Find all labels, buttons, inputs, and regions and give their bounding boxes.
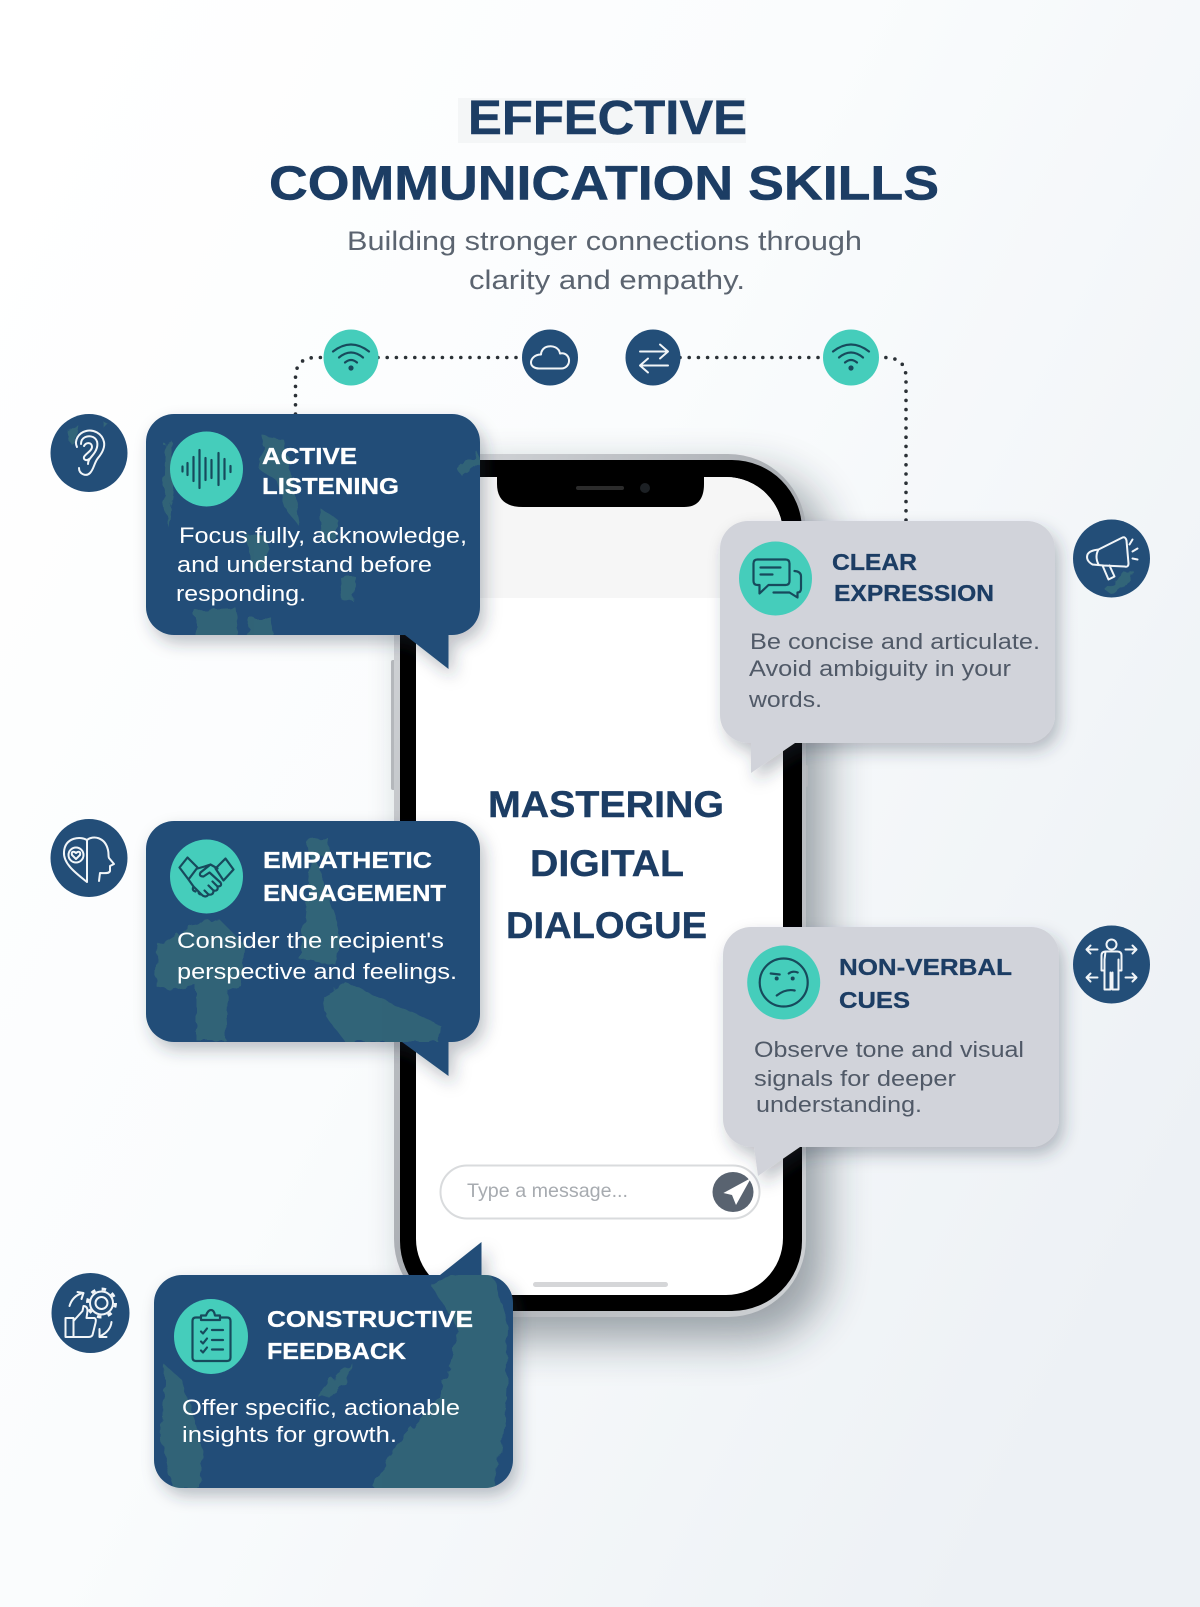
icon: thumbs up and gear badge xyxy=(52,1273,130,1353)
heading: EMPATHETIC xyxy=(263,847,432,873)
icon: handshake xyxy=(170,840,243,914)
icon: face xyxy=(747,946,820,1020)
panel: active listening xyxy=(146,414,480,669)
subtitle: Building stronger connections through xyxy=(347,226,862,256)
heading: FEEDBACK xyxy=(267,1338,406,1364)
description xyxy=(182,1395,460,1447)
heading: ACTIVE xyxy=(262,443,357,469)
heading xyxy=(263,847,446,906)
description: Focus fully, acknowledge, xyxy=(179,523,467,548)
description: perspective and feelings. xyxy=(177,959,457,984)
heading xyxy=(267,1306,473,1364)
panel: clear expression xyxy=(720,521,1055,773)
icon: wifi left xyxy=(324,330,378,386)
heading xyxy=(839,954,1012,1013)
icon: cloud xyxy=(522,330,578,386)
title: EFFECTIVE xyxy=(468,92,747,145)
heading: EXPRESSION xyxy=(834,580,994,606)
panel: empathetic engagement xyxy=(146,821,480,1076)
description: Consider the recipient's xyxy=(177,928,444,953)
description: Offer specific, actionable xyxy=(182,1395,460,1420)
description: Be concise and articulate. xyxy=(750,629,1040,654)
heading: CLEAR xyxy=(832,549,917,575)
description xyxy=(748,629,1040,712)
notch xyxy=(490,470,704,507)
message input field: Type a message... xyxy=(467,1180,628,1202)
phone mockup xyxy=(391,454,826,1340)
icon: chat bubbles xyxy=(739,542,812,616)
description: and understand before xyxy=(177,552,432,577)
phone screen xyxy=(416,477,783,1295)
icon: wifi right xyxy=(823,330,879,386)
description xyxy=(176,523,467,606)
home bar xyxy=(533,1282,668,1287)
description xyxy=(177,928,457,984)
icon: waveform xyxy=(170,432,243,506)
heading: LISTENING xyxy=(262,473,399,499)
heading: NON-VERBAL xyxy=(839,954,1012,980)
icon: ear badge xyxy=(50,414,128,492)
description: words. xyxy=(748,687,822,712)
heading: CUES xyxy=(839,987,910,1013)
phone center heading: MASTERING xyxy=(488,784,724,825)
heading: ENGAGEMENT xyxy=(263,880,446,906)
description xyxy=(754,1037,1024,1117)
icon: clipboard xyxy=(174,1299,248,1374)
heading xyxy=(262,443,399,499)
icon: person with arrows badge xyxy=(1073,926,1150,1004)
phone center heading: DIALOGUE xyxy=(506,905,707,946)
subtitle: clarity and empathy. xyxy=(469,265,745,295)
dotted connector line xyxy=(296,358,906,520)
description: signals for deeper xyxy=(754,1066,956,1091)
subtitle xyxy=(347,226,862,295)
panel: non-verbal cues xyxy=(723,927,1059,1176)
description: Avoid ambiguity in your xyxy=(749,656,1011,681)
heading: CONSTRUCTIVE xyxy=(267,1306,473,1332)
description: responding. xyxy=(176,581,306,606)
phone center heading: DIGITAL xyxy=(530,843,684,884)
heading xyxy=(832,549,994,606)
description: insights for growth. xyxy=(182,1422,397,1447)
phone center heading xyxy=(488,784,724,946)
description: understanding. xyxy=(756,1092,922,1117)
panel: constructive feedback xyxy=(154,1242,513,1490)
icon: megaphone badge xyxy=(1073,520,1150,598)
title: COMMUNICATION SKILLS xyxy=(269,158,939,210)
description: Observe tone and visual xyxy=(754,1037,1024,1062)
icon: heart and head badge xyxy=(50,819,128,897)
message input field xyxy=(440,1166,760,1218)
icon: exchange arrows xyxy=(626,330,680,386)
icon: send xyxy=(712,1172,754,1212)
title xyxy=(269,92,939,210)
